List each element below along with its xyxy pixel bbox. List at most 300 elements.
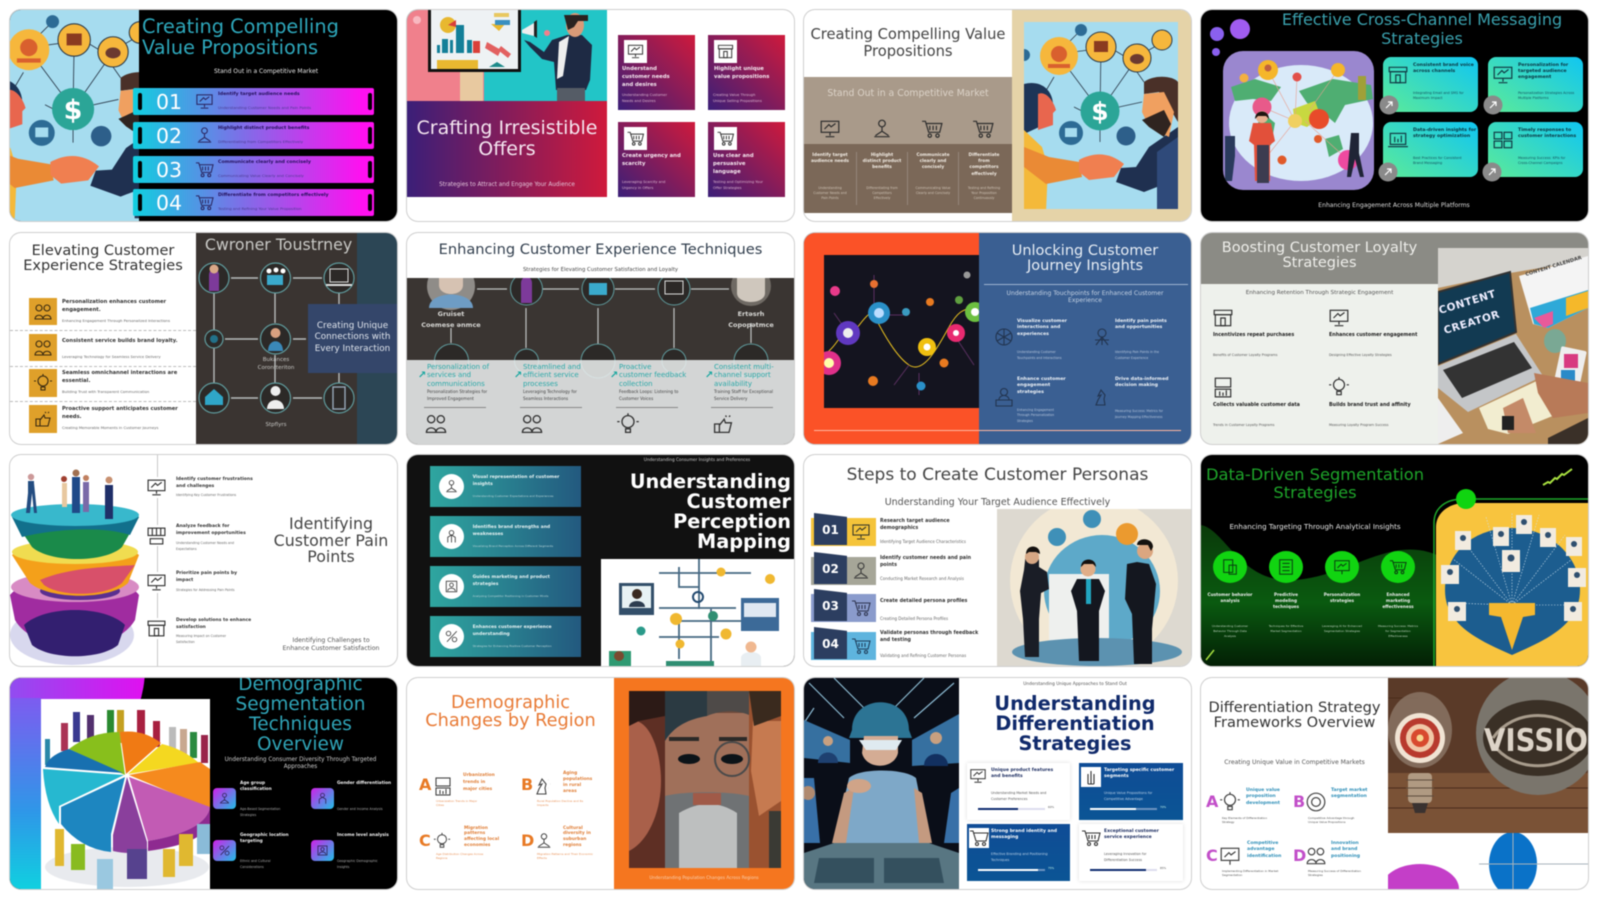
gradient left band <box>10 698 41 888</box>
region item B: in rural <box>563 782 581 788</box>
translucent technique band <box>407 360 794 444</box>
technique 2: Streamlined and <box>523 363 581 371</box>
technique 3: customer feedback <box>619 371 686 379</box>
offer card 1: Understanding Customer <box>622 93 667 97</box>
insight item 2: and opportunities <box>1115 325 1162 330</box>
illustration: presenter with megaphone <box>406 9 608 102</box>
gradient corner shape <box>0 568 145 768</box>
panel: identifying customer pain points <box>10 455 397 666</box>
insight item 3: Strategies <box>1017 419 1033 423</box>
panel: effective cross-channel messaging <box>1201 10 1588 221</box>
framework item B: Unique Value Propositions <box>1308 820 1346 824</box>
region item D: Effects <box>537 856 547 860</box>
step 02: 02 <box>822 562 839 576</box>
benefits band: effectively <box>971 172 997 177</box>
region item A <box>417 772 509 810</box>
title: Effective Cross-Channel Messaging <box>1282 10 1562 29</box>
strategy card 1 <box>967 762 1070 820</box>
framework item B: Competitive Advantage through <box>1308 816 1354 820</box>
node caption <box>257 356 295 370</box>
technique 1: Improved Engagement <box>427 396 474 401</box>
demographic item 1: Age-Based Segmentation <box>240 806 280 810</box>
subtitle: Enhancing Retention Through Strategic Engagement <box>1246 290 1393 296</box>
pain point 1 <box>146 476 254 498</box>
photo caption right: Copopətmce <box>728 320 774 328</box>
title: Experience Strategies <box>23 258 183 274</box>
region item A: Urbanization Trends in Major <box>436 798 477 802</box>
region item A: A <box>419 774 431 794</box>
image frame <box>1012 10 1191 221</box>
strategy card 1: Understanding Market Needs and <box>991 790 1046 794</box>
title <box>810 26 1006 60</box>
pain point 4: Develop solutions to enhance <box>176 618 251 623</box>
segmentation item 1: Customer behavior <box>1208 592 1252 597</box>
technique 3: Proactive <box>619 363 651 371</box>
framework item A: A <box>1206 792 1218 810</box>
node caption: Bukances <box>263 356 289 362</box>
panel: understanding differentiation strategies <box>804 678 1191 888</box>
strategy card 4: service experience <box>1104 835 1152 840</box>
step 03: 03 <box>822 599 839 613</box>
strategy item 4: needs. <box>62 414 82 420</box>
technique 1: Personalization Strategies for <box>427 389 487 394</box>
loyalty item 4 <box>1328 376 1411 427</box>
demographic item 3: targeting <box>240 838 263 844</box>
title: Techniques <box>249 714 352 735</box>
photo caption left <box>420 310 481 328</box>
decorative bubbles <box>1209 18 1251 57</box>
demographic item 3 <box>213 832 303 870</box>
step 03: Create detailed persona profiles <box>880 599 967 604</box>
perception card 1: insights <box>473 482 493 486</box>
offer card 4 <box>708 122 785 197</box>
benefits band: Pain Points <box>821 196 839 200</box>
technique 2: Leveraging Technology for <box>523 389 577 394</box>
node caption: Stpflyrs <box>266 422 286 428</box>
strategy card 2: segments <box>1104 774 1129 779</box>
photo: content creator desk <box>1437 248 1589 445</box>
perception card 2 <box>430 516 581 557</box>
benefits band: Effectively <box>874 196 890 200</box>
technique 3 <box>610 363 686 434</box>
technique 3: collection <box>619 380 653 388</box>
strategy item 2: Consistent service builds brand loyalty. <box>62 338 178 344</box>
strategy item 3 <box>28 368 178 398</box>
title <box>959 694 1191 754</box>
messaging card 1: Maximum Impact <box>1413 96 1443 100</box>
loyalty item 2 <box>1328 308 1418 357</box>
technique 4: Training Staff for Exceptional <box>714 389 773 394</box>
framework item D: Measuring Success of Differentiation <box>1308 868 1361 872</box>
step 04: Validate personas through feedback <box>880 631 978 636</box>
step 02 bar: Highlight distinct product benefits <box>218 126 309 131</box>
subtitle: Understanding Unique Approaches to Stand Out <box>1023 682 1127 686</box>
subtitle: Identifying Challenges to <box>292 637 370 644</box>
subtitle: Strategies for Elevating Customer Satisfaction and Loyalty <box>523 266 678 272</box>
segmentation item 4: marketing <box>1386 598 1410 603</box>
region item C: Age Distribution Changes Across <box>436 852 483 856</box>
panel: differentiation strategy frameworks overview <box>1201 678 1588 888</box>
perception card 4 <box>430 616 581 657</box>
title <box>1012 242 1159 274</box>
offer card 4: Use clear and <box>713 153 754 159</box>
step 02 bar: Differentiating from Competitors Effectively <box>218 139 303 144</box>
region item C: C <box>419 830 431 850</box>
framework item C: advantage <box>1247 847 1274 852</box>
panel: unlocking customer journey insights <box>804 232 1191 444</box>
title: Differentiation Strategy <box>1208 698 1381 716</box>
insight item 4: decision making <box>1115 383 1158 388</box>
title band: Boosting Customer Loyalty <box>1222 240 1417 256</box>
step 02 bar: 02 <box>156 124 182 148</box>
benefits band: Testing and Refining <box>968 186 1000 190</box>
benefits band: Your Proposition <box>971 191 997 195</box>
step 01 bar: Identify target audience needs <box>218 92 300 97</box>
strategy card 4: Exceptional customer <box>1104 828 1159 834</box>
segmentation item 4: Measuring Success: Metrics <box>1378 624 1418 628</box>
node caption: Corontteriton <box>258 364 294 370</box>
pain point 3: Strategies for Addressing Pain Points <box>176 588 235 592</box>
step 04 bar: 04 <box>156 191 182 215</box>
strategy item 4: Proactive support anticipates customer <box>62 406 178 412</box>
title <box>407 694 614 730</box>
audience funnel panel <box>1431 455 1588 666</box>
strategy item 1: Personalization enhances customer <box>62 298 166 304</box>
callout: Connections with <box>315 332 390 342</box>
offer card 4: persuasive <box>713 161 746 167</box>
insight item 1: experiences <box>1017 332 1049 337</box>
loyalty item 4: Builds brand trust and affinity <box>1329 402 1411 408</box>
strategy card 2 <box>1079 762 1183 820</box>
segmentation item 3: strategies <box>1330 598 1354 603</box>
title: Value Propositions <box>142 36 318 58</box>
perception card 2: Identifies brand strengths and <box>473 525 550 530</box>
title: Strategies <box>1019 732 1131 755</box>
photo caption left: Coemese ənmce <box>421 320 481 328</box>
squiggle <box>1541 467 1575 487</box>
title <box>591 472 791 552</box>
region item C: economies <box>464 843 490 848</box>
panel: boosting customer loyalty strategies <box>1201 232 1588 444</box>
segmentation item 2: techniques <box>1273 604 1299 609</box>
title: Creating Compelling <box>142 15 339 38</box>
insight item 3: engagement <box>1017 383 1050 388</box>
technique 2: efficient service <box>523 371 579 379</box>
dark heading: Cwroner Toustrney <box>205 234 352 254</box>
strategy card 1: and benefits <box>991 774 1023 779</box>
title <box>207 674 394 756</box>
panel: creating compelling value propositions, tan <box>804 10 1191 221</box>
region item A: trends in <box>463 780 485 784</box>
technique 1: communications <box>427 380 485 388</box>
pain point 4: Measuring Impact on Customer <box>176 634 226 638</box>
benefits band: concisely <box>922 165 944 170</box>
offer card 2 <box>708 35 785 110</box>
framework item B: Target market <box>1331 788 1368 792</box>
messaging card 1 <box>1383 57 1478 112</box>
region item C <box>417 826 509 864</box>
offer card 1: customer needs <box>622 74 670 80</box>
framework item B: B <box>1293 792 1305 810</box>
demographic item 1: Age group <box>240 780 265 786</box>
step 01: demographics <box>880 526 918 531</box>
step 02: Conducting Market Research and Analysis <box>880 576 964 581</box>
region item B: areas <box>563 788 577 794</box>
strategy card 4: Differentiation Success <box>1104 858 1142 862</box>
loyalty item 2: Enhances customer engagement <box>1329 332 1417 338</box>
benefits band: Communicate <box>916 153 950 158</box>
strategy card 3: Techniques <box>991 858 1009 862</box>
photo caption left: Gruiset <box>438 310 464 318</box>
strategy card 3: Strong brand identity and <box>991 828 1057 834</box>
strategy item 4: Creating Memorable Moments in Customer Journeys <box>62 426 158 430</box>
segmentation item 1: Behavior Through Data <box>1213 629 1247 633</box>
messaging card 1: across channels <box>1413 69 1455 74</box>
segmentation item 1: Understanding Customer <box>1212 624 1248 628</box>
title <box>1282 10 1562 48</box>
demographic item 1: Strategies <box>240 812 256 816</box>
insight item 1: Understanding Customer <box>1017 350 1056 354</box>
strategy item 2: Leveraging Technology for Seamless Service Delivery <box>62 354 161 358</box>
region item C: Regions <box>436 856 447 860</box>
arrow badges <box>1378 95 1503 182</box>
messaging card 3: Best Practices for Consistent <box>1413 156 1462 160</box>
region item D <box>519 826 611 864</box>
loyalty item 3: Trends in Customer Loyalty Programs <box>1213 422 1275 426</box>
pain point 2: Understanding Customer Needs and <box>176 541 234 545</box>
loyalty item 2: Designing Effective Loyalty Strategies <box>1329 352 1392 356</box>
perception card 3 <box>430 566 581 607</box>
pain point 2 <box>146 522 246 551</box>
technique 4: ↗ <box>705 370 713 381</box>
step 03: Creating Detailed Persona Profiles <box>880 616 948 621</box>
benefits band: Competitors <box>872 191 892 195</box>
step 03 bar: 03 <box>156 158 182 182</box>
demographic item 4: Income level analysis <box>337 832 389 838</box>
segmentation item 1: Analysis <box>1224 634 1236 638</box>
technique 2: processes <box>523 380 558 388</box>
orange frame <box>804 232 979 444</box>
benefits band: benefits <box>872 165 892 170</box>
title: Segmentation <box>235 694 366 715</box>
title: Creating Compelling Value <box>811 26 1005 43</box>
photo: composite faces <box>628 690 780 868</box>
region item B <box>519 772 611 810</box>
technique 4: Service Delivery <box>714 396 747 401</box>
segmentation item 4: effectiveness <box>1382 604 1414 609</box>
subtitle: Understanding Consumer Insights and Preferences <box>644 457 750 462</box>
title: Differentiation <box>995 712 1155 735</box>
callout: Every Interaction <box>315 344 390 354</box>
title band: Strategies <box>1282 255 1357 271</box>
green glow background <box>1201 455 1437 666</box>
messaging card 4 <box>1488 122 1583 177</box>
framework item C: C <box>1206 846 1218 864</box>
step 04 bar: Differentiate from competitors effectively <box>218 193 329 198</box>
insight item 2: Identify pain points <box>1115 318 1167 324</box>
network diagram <box>195 232 398 445</box>
photo: content creator desk: CONTENT <box>1438 287 1498 316</box>
step 02: Identify customer needs and pain <box>880 556 971 561</box>
messaging card 2 <box>1488 57 1583 112</box>
strategy card 2: Unique Value Propositions for <box>1104 790 1152 794</box>
subtitle: Strategies to Attract and Engage Your Audience <box>439 182 575 188</box>
step 03 bar: Communicate clearly and concisely <box>218 160 311 165</box>
region item D: diversity in <box>563 831 591 836</box>
technique 4: channel support <box>714 371 771 379</box>
framework item C <box>1205 840 1290 880</box>
insight item 3: Enhance customer <box>1017 376 1066 382</box>
illustration: handshake with dollar network <box>1023 22 1179 210</box>
messaging card 2: Multiple Platforms <box>1518 96 1549 100</box>
technique 1: Personalization of <box>427 363 489 371</box>
framework item A: development <box>1246 801 1280 806</box>
pain point 2: Analyze feedback for <box>176 524 229 529</box>
panel: creating compelling value propositions, dark <box>10 10 397 221</box>
insight item 3 <box>995 376 1066 423</box>
step 01 bar <box>133 88 374 115</box>
demographic item 1: classification <box>240 786 272 792</box>
demographic item 4 <box>311 832 395 870</box>
insight item 4: Measuring Success: Metrics for <box>1115 408 1163 412</box>
perception card 2: weaknesses <box>473 532 503 536</box>
offer card 2: value propositions <box>714 74 769 80</box>
strategy card 4: 85% <box>1160 866 1166 870</box>
step 01 <box>810 512 966 547</box>
demographic item 3: Ethnic and Cultural <box>240 858 271 862</box>
segmentation item 2: Market Segmentation <box>1270 629 1302 633</box>
offer card 1: Needs and Desires <box>622 99 656 103</box>
perception card 3: strategies <box>473 582 498 586</box>
region item B: Impacts <box>537 802 549 806</box>
segmentation item 4: for Segmentation <box>1385 629 1411 633</box>
framework item B: segmentation <box>1331 794 1367 799</box>
framework item D: D <box>1293 846 1306 864</box>
strategy item 3: Seamless omnichannel interactions are <box>62 370 177 376</box>
perception card 1 <box>430 466 581 507</box>
title <box>142 15 339 59</box>
offer card 1: and desires <box>622 82 657 88</box>
insight item 3: Through Personalization <box>1017 413 1054 417</box>
title: Crafting Irresistible <box>417 117 597 139</box>
step 01 bar: Understanding Customer Needs and Pain Points <box>218 105 311 110</box>
panel: elevating customer experience strategies <box>10 232 397 444</box>
perception card 3: Analyzing Competitor Positioning in Customer Minds <box>473 594 548 598</box>
pain point 1: Identifying Key Customer Frustrations <box>176 493 236 497</box>
messaging card 3: Brand Messaging <box>1413 161 1442 165</box>
title <box>416 117 598 160</box>
panel: enhancing customer experience techniques <box>407 232 794 444</box>
title: Enhancing Customer Experience Techniques <box>439 240 762 258</box>
region item C: affecting local <box>464 837 499 842</box>
messaging card 1: Consistent brand voice <box>1413 63 1474 68</box>
segmentation item 2 <box>1258 551 1314 643</box>
callout <box>308 304 397 372</box>
technique 1: services and <box>427 371 471 379</box>
offer card 2: Unique Selling Propositions <box>713 99 762 103</box>
insight item 4: Journey Mapping Effectiveness <box>1115 415 1163 419</box>
photo: light bulb with target and vision sign <box>1388 678 1588 832</box>
offer card 3: scarcity <box>622 161 645 167</box>
benefits band: Communicating Value <box>916 186 950 190</box>
insight item 1: Touchpoints and Interactions <box>1017 356 1062 360</box>
pain point 3 <box>146 570 238 594</box>
framework item A: Unique value <box>1246 788 1280 792</box>
insight item 3: Enhancing Engagement <box>1017 408 1054 412</box>
messaging card 3: Data-driven insights for <box>1413 128 1476 133</box>
offer card 4: language <box>713 169 741 175</box>
pain point 3: Prioritize pain points by <box>176 571 237 576</box>
step 03 <box>810 588 968 623</box>
step 04 <box>810 626 979 661</box>
subtitle: Enhancing Targeting Through Analytical Insights <box>1229 522 1401 531</box>
perception card 1: Visual representation of customer <box>473 475 559 480</box>
demographic item 2: Gender differentiation <box>337 780 391 786</box>
offer card 3: Create urgency and <box>622 153 681 159</box>
subtitle: Stand Out in a Competitive Market <box>214 68 318 75</box>
footer caption: Understanding Population Changes Across Regions <box>649 876 759 880</box>
pain point 2: Expectations <box>176 547 197 551</box>
perception map image <box>600 559 794 666</box>
photo: team at presentation <box>997 509 1191 666</box>
technique 2: Seamless Interactions <box>523 396 568 401</box>
offer card 3 <box>618 122 695 197</box>
title: Mapping <box>697 530 791 553</box>
messaging card 4: Cross-Channel Campaigns <box>1518 161 1563 165</box>
region item B: Rural Population Decline and Its <box>537 798 583 802</box>
strategy card 1: Customer Preferences <box>991 797 1027 801</box>
strategy card 2: 70% <box>1160 804 1166 808</box>
segmentation item 4: Effectiveness <box>1388 634 1408 638</box>
step 01: Research target audience <box>880 519 950 524</box>
loyalty item 3 <box>1212 376 1300 427</box>
step 01 bar: 01 <box>156 90 182 114</box>
technique 4: availability <box>714 380 752 388</box>
region item A: major cities <box>463 786 492 792</box>
subtitle: Enhance Customer Satisfaction <box>282 645 379 652</box>
segmentation item 3: Personalization <box>1324 592 1360 597</box>
strategy item 3: Building Trust with Transparent Communication <box>62 390 149 394</box>
segmentation item 1 <box>1202 551 1258 643</box>
framework item D: positioning <box>1331 854 1360 859</box>
title: Identifying <box>289 514 373 533</box>
segmentation item 4 <box>1370 551 1426 643</box>
benefits band: clearly and <box>920 159 946 164</box>
region item D: regions <box>563 843 582 848</box>
step 03 bar <box>133 156 374 183</box>
panel: demographic changes by region <box>407 678 794 888</box>
strategy card 2: Competitive Advantage <box>1104 797 1143 801</box>
messaging card 2: targeted audience <box>1518 69 1567 74</box>
photo caption right: Ertəsrh <box>738 310 764 318</box>
messaging card 4: customer interactions <box>1518 134 1576 139</box>
framework item C: Competitive <box>1247 840 1278 846</box>
strategy card 4: Leveraging Innovation for <box>1104 852 1146 856</box>
benefits band: distinct product <box>863 159 901 164</box>
messaging card 3 <box>1383 122 1478 177</box>
subtitle: Understanding Touchpoints for Enhanced Customer <box>1007 290 1163 296</box>
insight item 2 <box>1094 318 1168 360</box>
strategy card 2: Targeting specific customer <box>1104 768 1174 772</box>
step 01: 01 <box>822 523 839 537</box>
pain point 4 <box>146 618 256 646</box>
illustration: world map with people <box>1222 50 1375 191</box>
region item B: populations <box>563 776 592 782</box>
framework item C: Segmentation <box>1222 872 1242 876</box>
technique 3: Customer Voices <box>619 396 653 401</box>
panel: crafting irresistible offers <box>407 10 794 221</box>
subtitle: Experience <box>1068 297 1102 304</box>
